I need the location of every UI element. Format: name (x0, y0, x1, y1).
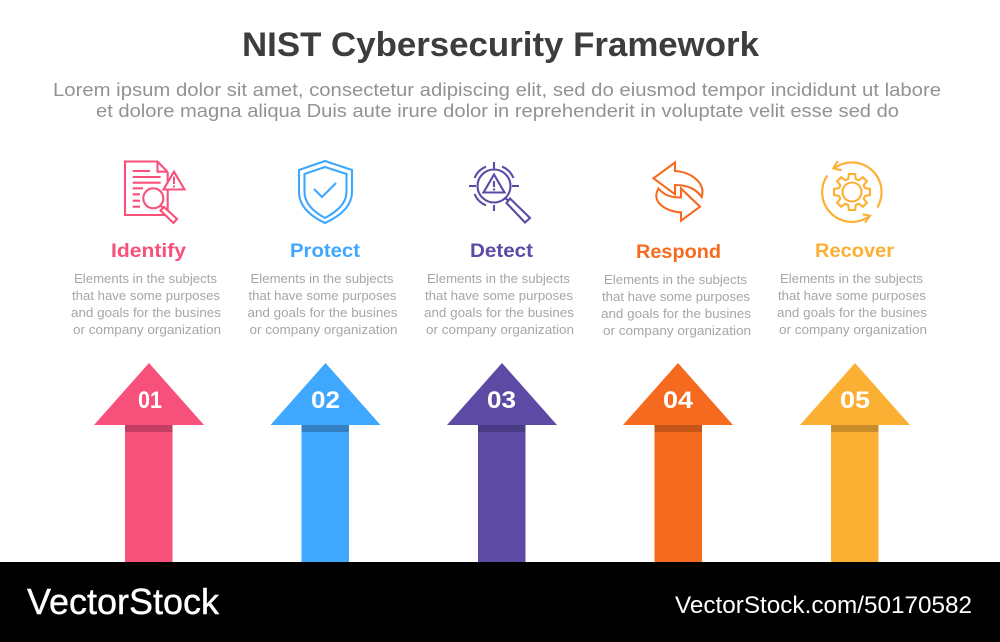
title: NIST Cybersecurity Framework (242, 26, 759, 64)
footer watermark bar: VectorStock (27, 581, 220, 622)
description: Identify: that have some purposes (72, 288, 220, 303)
description: Recover: or company organization (779, 322, 927, 337)
description: Detect: or company organization (426, 322, 574, 337)
description: Respond: and goals for the busines (601, 306, 752, 321)
heading: Respond: Respond (636, 242, 721, 263)
arrow 04 (623, 363, 733, 562)
arrow 03 (447, 363, 557, 562)
description: Recover: and goals for the busines (777, 305, 928, 320)
arrow 01 (94, 363, 204, 562)
description: Recover: that have some purposes (778, 288, 926, 303)
description: Respond: that have some purposes (602, 289, 750, 304)
intro text (53, 79, 941, 121)
column 4: Respond (601, 162, 752, 562)
column 3: Detect (424, 162, 575, 562)
description: Identify: Elements in the subjects (74, 271, 218, 286)
arrow 01: 01 (138, 387, 162, 414)
arrow 05: 05 (840, 387, 870, 414)
heading: Protect: Protect (290, 241, 361, 262)
intro text: Lorem ipsum dolor sit amet, consectetur adipiscing elit, sed do eiusmod tempor incididunt ut labore (53, 79, 941, 100)
icon: gear with circular arrows (822, 161, 882, 223)
arrow 02: 02 (311, 387, 340, 414)
arrow 05 (800, 363, 910, 562)
description: Protect: Elements in the subjects (250, 271, 394, 286)
description: Detect: Elements in the subjects (427, 271, 571, 286)
description: Detect (424, 271, 575, 337)
footer watermark bar (0, 562, 1000, 642)
column 5: Recover (777, 161, 928, 562)
heading: Detect: Detect (470, 241, 534, 262)
description: Recover: Elements in the subjects (780, 271, 924, 286)
column 1: Identify (71, 162, 222, 562)
description: Identify: and goals for the busines (71, 305, 222, 320)
intro text: et dolore magna aliqua Duis aute irure dolor in reprehenderit in voluptate velit esse sed do (96, 100, 899, 121)
description: Detect: and goals for the busines (424, 305, 575, 320)
description: Protect: or company organization (250, 322, 398, 337)
description: Identify (71, 271, 222, 337)
description: Protect: that have some purposes (248, 288, 397, 303)
arrow 02 (270, 363, 380, 562)
description: Detect: that have some purposes (425, 288, 573, 303)
description: Respond: Elements in the subjects (604, 272, 748, 287)
description: Respond (601, 272, 752, 338)
arrow 03: 03 (487, 387, 516, 414)
arrow 04: 04 (663, 387, 694, 414)
icon: document with magnifier and warning (125, 162, 184, 223)
icon: shield with check (299, 161, 352, 223)
description: Protect (248, 271, 398, 337)
column 2: Protect (248, 161, 398, 562)
heading: Recover: Recover (815, 241, 895, 262)
icon: magnifier with warning (469, 162, 530, 222)
description: Protect: and goals for the busines (248, 305, 398, 320)
description: Identify: or company organization (73, 322, 221, 337)
icon: two circular arrows (654, 162, 702, 221)
footer watermark bar: VectorStock.com/50170582 (675, 592, 972, 619)
description: Recover (777, 271, 928, 337)
heading: Identify: Identify (111, 241, 186, 262)
description: Respond: or company organization (603, 323, 751, 338)
